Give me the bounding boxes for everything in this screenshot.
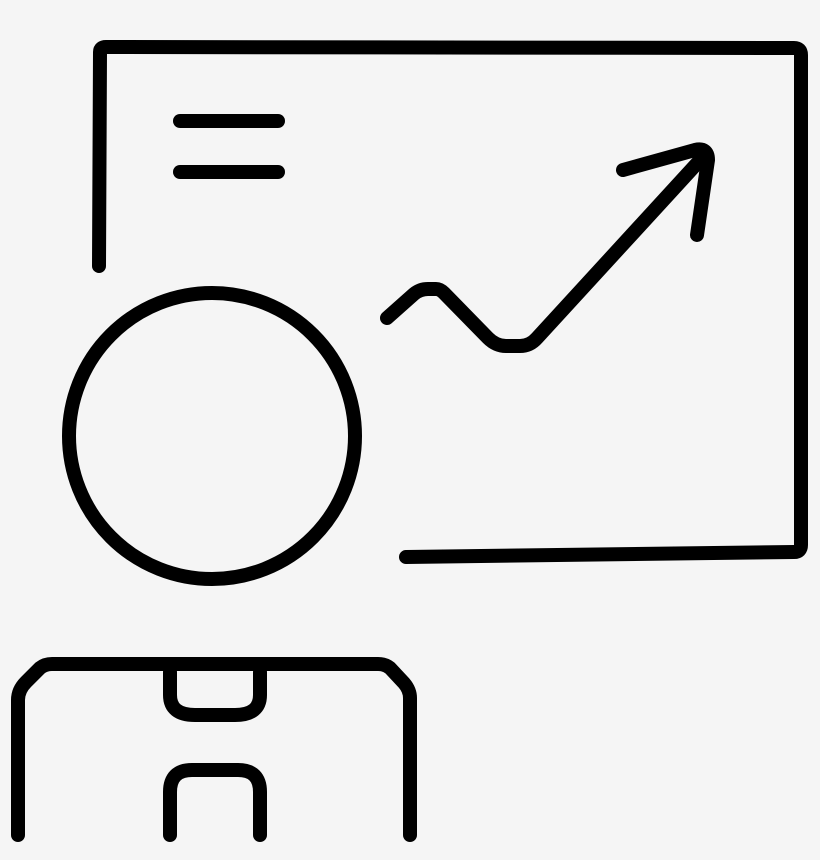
growth arrow <box>387 149 708 346</box>
person body <box>18 664 410 835</box>
collar <box>170 672 260 715</box>
torso gap <box>170 770 260 835</box>
person head <box>69 293 355 579</box>
presentation board <box>99 47 801 557</box>
text lines on board <box>180 121 278 172</box>
